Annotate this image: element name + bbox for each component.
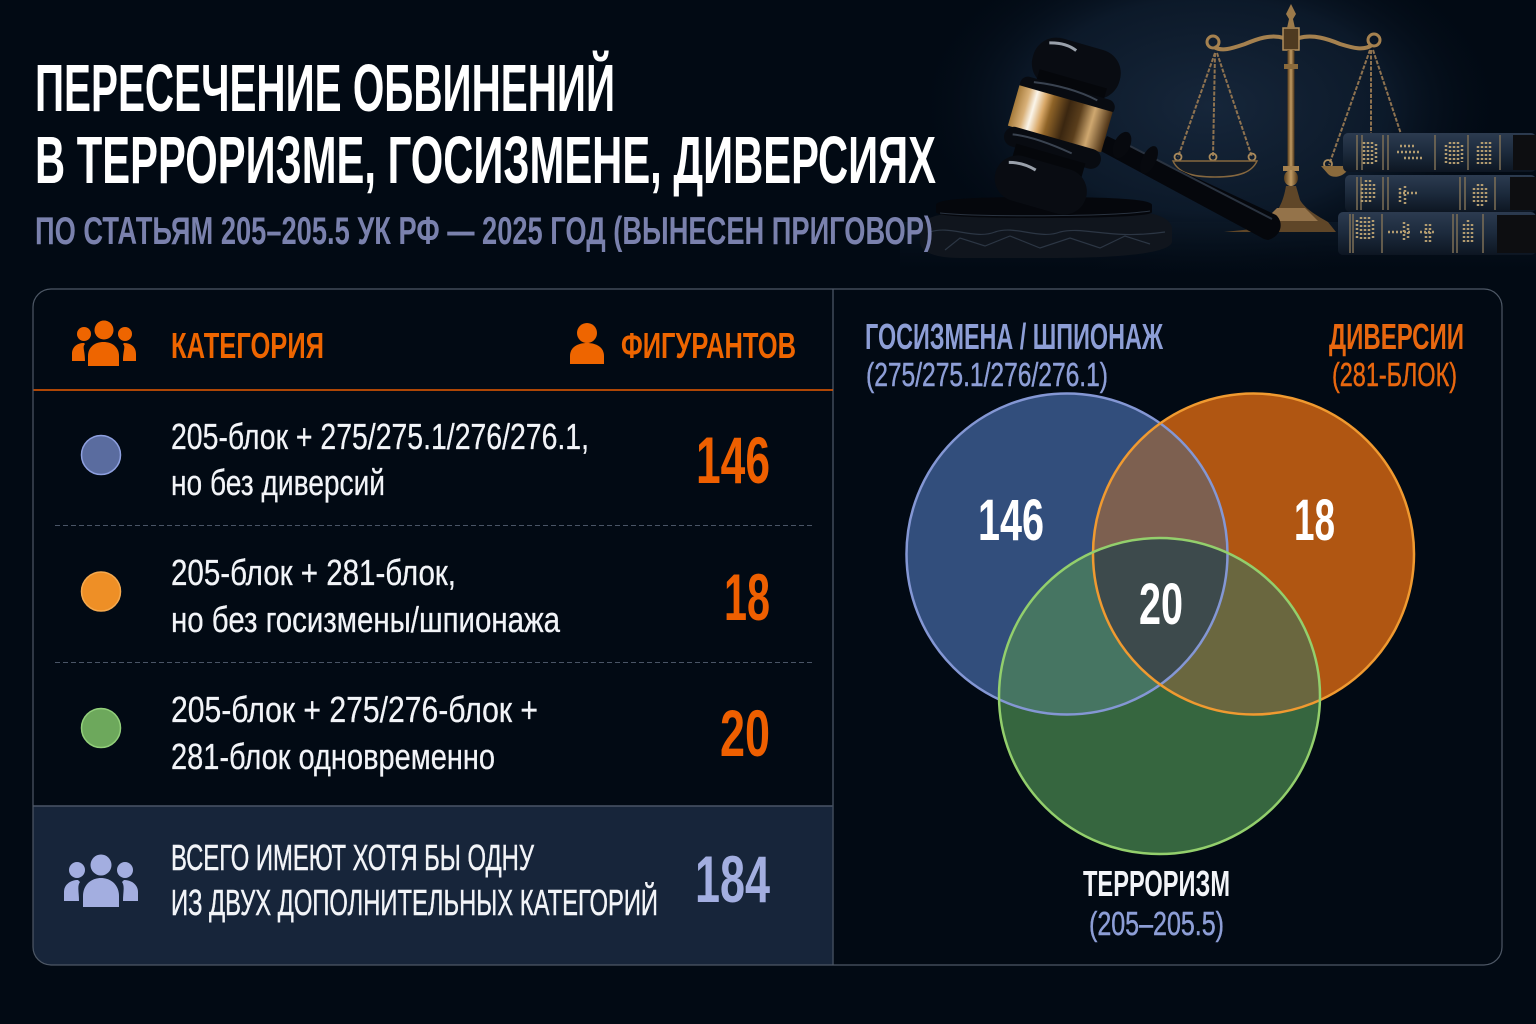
venn diagram	[906, 394, 1414, 854]
icon: group of people lavender	[64, 854, 138, 907]
icon: stack of law books	[1338, 133, 1536, 255]
row 3 text: 281-блок одновременно	[171, 736, 495, 777]
venn outlines	[906, 394, 1414, 854]
row 1 text: 205-блок + 275/275.1/276/276.1,	[171, 416, 589, 457]
label: terrorism: ТЕРРОРИЗМ	[1083, 863, 1230, 904]
venn regions	[906, 394, 1414, 854]
row 2	[82, 552, 770, 640]
main panel	[33, 289, 1502, 965]
row 2 text	[171, 552, 561, 640]
row 3 text	[171, 689, 538, 777]
bullet green	[82, 708, 120, 748]
venn number 18: 18	[1294, 488, 1335, 553]
illustration: gavel, scales and law books	[880, 0, 1536, 290]
label: sabotage: (281-БЛОК)	[1332, 356, 1457, 393]
bullet blue	[82, 436, 120, 474]
title: ПЕРЕСЕЧЕНИЕ ОБВИНЕНИЙ	[35, 50, 615, 126]
total row	[64, 837, 770, 923]
icon: person orange	[570, 323, 604, 364]
row 1	[82, 416, 770, 503]
table header	[72, 320, 796, 366]
label: terrorism	[1083, 863, 1230, 942]
total text: ВСЕГО ИМЕЮТ ХОТЯ БЫ ОДНУ	[171, 837, 535, 878]
row 2 text: но без госизмены/шпионажа	[171, 599, 561, 640]
subtitle: ПО СТАТЬЯМ 205–205.5 УК РФ — 2025 ГОД (ВЫНЕСЕН ПРИГОВОР)	[35, 210, 933, 253]
row 3	[82, 689, 770, 777]
total number: 184	[695, 842, 770, 916]
title: В ТЕРРОРИЗМЕ, ГОСИЗМЕНЕ, ДИВЕРСИЯХ	[35, 123, 936, 198]
title	[35, 50, 936, 198]
row 1 text: но без диверсий	[171, 462, 385, 503]
icon: group of people orange	[72, 320, 136, 366]
row 1 text	[171, 416, 589, 503]
label: treason: (275/275.1/276/276.1)	[866, 356, 1108, 393]
icon: gavel	[987, 30, 1281, 240]
label: treason: ГОСИЗМЕНА / ШПИОНАЖ	[865, 316, 1163, 357]
icon: scales of justice	[1173, 4, 1401, 232]
bullet orange	[82, 572, 120, 611]
total text: ИЗ ДВУХ ДОПОЛНИТЕЛЬНЫХ КАТЕГОРИЙ	[171, 881, 658, 923]
total text	[171, 837, 658, 923]
label: sabotage	[1329, 316, 1464, 393]
icon: sound block	[920, 197, 1172, 258]
label: sabotage: ДИВЕРСИИ	[1329, 316, 1464, 357]
row 3 text: 205-блок + 275/276-блок +	[171, 689, 538, 730]
heading: category: КАТЕГОРИЯ	[171, 325, 324, 366]
row 1 number: 146	[696, 423, 770, 497]
heading: defendants: ФИГУРАНТОВ	[621, 325, 796, 366]
row 3 number: 20	[720, 696, 770, 770]
venn number 146: 146	[978, 488, 1044, 553]
label: treason	[865, 316, 1163, 393]
row 2 text: 205-блок + 281-блок,	[171, 552, 456, 593]
venn number 20: 20	[1139, 572, 1183, 637]
row 2 number: 18	[724, 560, 770, 634]
label: terrorism: (205–205.5)	[1089, 905, 1224, 942]
